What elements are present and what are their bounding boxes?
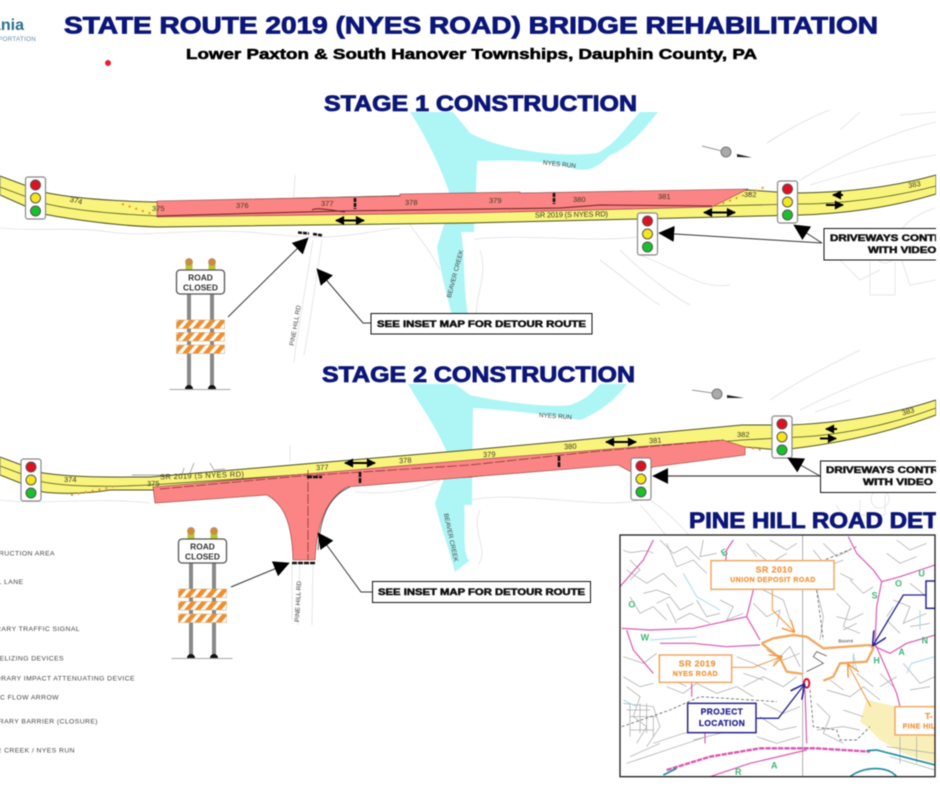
label: Pine Hill Road [895,707,940,735]
stage 1 plan [0,110,940,390]
station numbers: 374 [64,475,77,484]
station numbers [69,179,921,213]
construction area [157,189,748,217]
road closed sign: ROAD [188,272,213,282]
creek island [464,505,472,560]
road label: SR 2019 (S NYES RD) [160,470,245,481]
creek and road labels: NYES RUN [543,160,577,170]
road closed sign: ROAD [190,542,215,552]
township letters: R [735,767,742,777]
station numbers: 380 [573,195,586,204]
station numbers: 382 [737,430,750,439]
borough shaded area [860,700,935,763]
label: SR 2019: NYES ROAD [673,671,718,678]
label: blue callout [926,581,940,608]
detour route [762,635,873,681]
locality label: Boornt [838,639,854,645]
label: SR 2019 [659,655,732,682]
station numbers: 374 [69,195,83,207]
interstate [663,750,935,777]
winding creek road [807,652,827,672]
arrow to signal [653,475,820,477]
traffic signal [778,181,798,223]
station numbers [64,405,915,488]
arrow to road [317,269,371,323]
township letters: E [719,547,729,558]
north arrow [702,146,752,158]
road closed sign: CLOSED [185,552,220,562]
map background [620,535,935,777]
station numbers: 380 [564,442,577,451]
station numbers: 375 [147,479,160,488]
construction area [153,440,745,560]
label: SR 2010 [711,561,834,589]
temporary barriers [292,456,559,563]
station numbers: 376 [236,201,249,210]
lane markings in work zone [160,440,723,560]
callout: inset map [372,582,590,602]
traffic signal [26,177,46,219]
stage 2 heading: STAGE 2 CONSTRUCTION [322,362,635,387]
highway [667,748,870,770]
streams [623,573,935,707]
creek and road labels: BEAVER CREEK [446,249,466,299]
north arrow [692,389,744,399]
arrow to road [318,533,372,592]
creek [408,384,627,572]
creek island [461,232,474,325]
township letters: A [898,647,905,657]
station numbers: 381 [649,436,662,445]
lane markings in work zone [157,205,712,216]
label: project location: PROJECT [701,706,743,716]
creek and road labels: BEAVER CREEK [442,513,459,563]
callout: driveways [824,228,940,260]
township letters: N [922,635,928,645]
station numbers: 378 [399,456,412,465]
township letters: W [641,633,650,643]
road label: SR 2019 (S NYES RD) [535,209,609,220]
project leader lines [757,595,926,718]
local streets [623,540,935,770]
township letters: O [895,579,902,589]
callout: driveways: DRIVEWAYS CONTROLLED [826,465,940,475]
township letters [628,547,928,777]
map frame [620,535,935,777]
project marker [804,679,809,688]
label: SR 2019: SR 2019 [679,659,716,669]
station numbers: 377 [321,199,334,208]
station numbers: 377 [316,463,329,472]
label: project location [688,703,756,733]
creek and road labels [289,160,577,346]
callout: inset map [371,314,592,334]
arrow to signal [659,233,822,243]
red location dot [105,60,111,66]
callout: inset map: SEE INSET MAP FOR DETOUR ROUTE [377,319,586,329]
road closed sign [172,527,232,658]
road centre line [0,408,936,486]
background topography lines [0,110,936,362]
callout: driveways [820,461,940,492]
legend [0,550,135,754]
creek and road labels: NYES RUN [539,412,573,421]
yellow roadway [0,175,936,227]
traffic signal [772,416,792,458]
township letters: A [771,760,778,770]
station numbers: 375 [152,204,165,213]
station numbers: 382 [744,190,757,199]
county and municipal lines [622,547,870,740]
station numbers: 379 [489,196,502,205]
arrow to signal [794,225,822,243]
label: Pine Hill Road: T- [925,711,933,721]
traffic signal [631,458,651,500]
stage 2 plan [0,350,940,658]
station numbers: 383 [907,179,921,190]
township letters: S [872,590,878,600]
station numbers: 378 [405,198,418,207]
arrow to signal [788,458,820,476]
road closed sign: CLOSED [183,282,218,292]
label: SR 2010: SR 2010 [756,564,793,574]
station numbers: 383 [901,405,915,417]
road centre line [0,186,936,216]
creek [410,112,658,330]
traffic signal [638,213,658,255]
arrow to closure [228,238,308,317]
background topography lines [0,350,936,625]
major roads [620,537,935,777]
logo: PennDOT [0,17,36,43]
traffic flow arrows [336,195,843,220]
route leader lines [732,589,871,707]
creek and road labels: PINE HILL RD [289,304,303,346]
title: STATE ROUTE 2019 (NYES ROAD) BRIDGE REHABILITATION [64,12,878,40]
township letters: H [873,655,880,665]
subtitle: Lower Paxton & South Hanover Townships, Dauphin County, PA [186,47,758,63]
creek and road labels [294,412,573,622]
side street edge [318,487,350,550]
station numbers: 381 [658,192,671,201]
traffic signal [21,459,41,501]
channelizing devices [71,447,762,495]
callout: inset map: SEE INSET MAP FOR DETOUR ROUTE [378,587,585,597]
channelizing devices [122,187,765,215]
traffic flow arrows [345,429,837,463]
station numbers: 379 [483,450,496,459]
label: project location: LOCATION [699,718,745,728]
yellow roadway [0,400,936,493]
meridian line [802,535,804,777]
township letters: O [628,599,635,609]
township letters: U [918,569,925,579]
arrow to closure [231,563,289,587]
creek and road labels: PINE HILL RD [294,581,303,622]
side street curb [132,463,225,475]
temporary barriers [298,193,554,236]
stage 1 heading: STAGE 1 CONSTRUCTION [324,91,637,116]
label: SR 2010: UNION DEPOSIT ROAD [730,577,816,584]
road closed sign [170,258,230,390]
detour inset map [620,535,940,777]
